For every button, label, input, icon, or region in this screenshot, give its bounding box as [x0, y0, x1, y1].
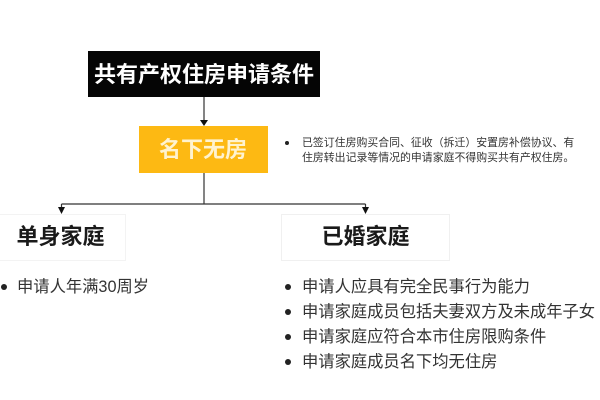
condition: yellow box — [139, 126, 268, 173]
married household requirements list: 申请人应具有完全民事行为能力 — [302, 278, 530, 296]
panel: single household heading: 单身家庭 — [16, 224, 104, 249]
married household requirements list: 申请家庭应符合本市住房限购条件 — [302, 328, 546, 346]
title: black banner: 共有产权住房申请条件 — [94, 62, 314, 87]
panel: married household heading — [281, 214, 450, 261]
note text block: 已签订住房购买合同、征收（拆迁）安置房补偿协议、有 — [302, 137, 574, 149]
married household requirements list: 申请家庭成员名下均无住房 — [302, 353, 497, 371]
note text block: 住房转出记录等情况的申请家庭不得购买共有产权住房。 — [302, 152, 574, 164]
panel: single household heading — [0, 214, 126, 261]
condition: yellow box: 名下无房 — [159, 136, 247, 162]
married household requirements list — [285, 278, 595, 371]
note text block — [285, 136, 574, 164]
panel: married household heading: 已婚家庭 — [321, 224, 410, 249]
title: black banner — [88, 51, 320, 97]
married household requirements list: 申请家庭成员包括夫妻双方及未成年子女 — [302, 303, 595, 321]
single household requirements list: 申请人年满30周岁 — [17, 278, 149, 296]
